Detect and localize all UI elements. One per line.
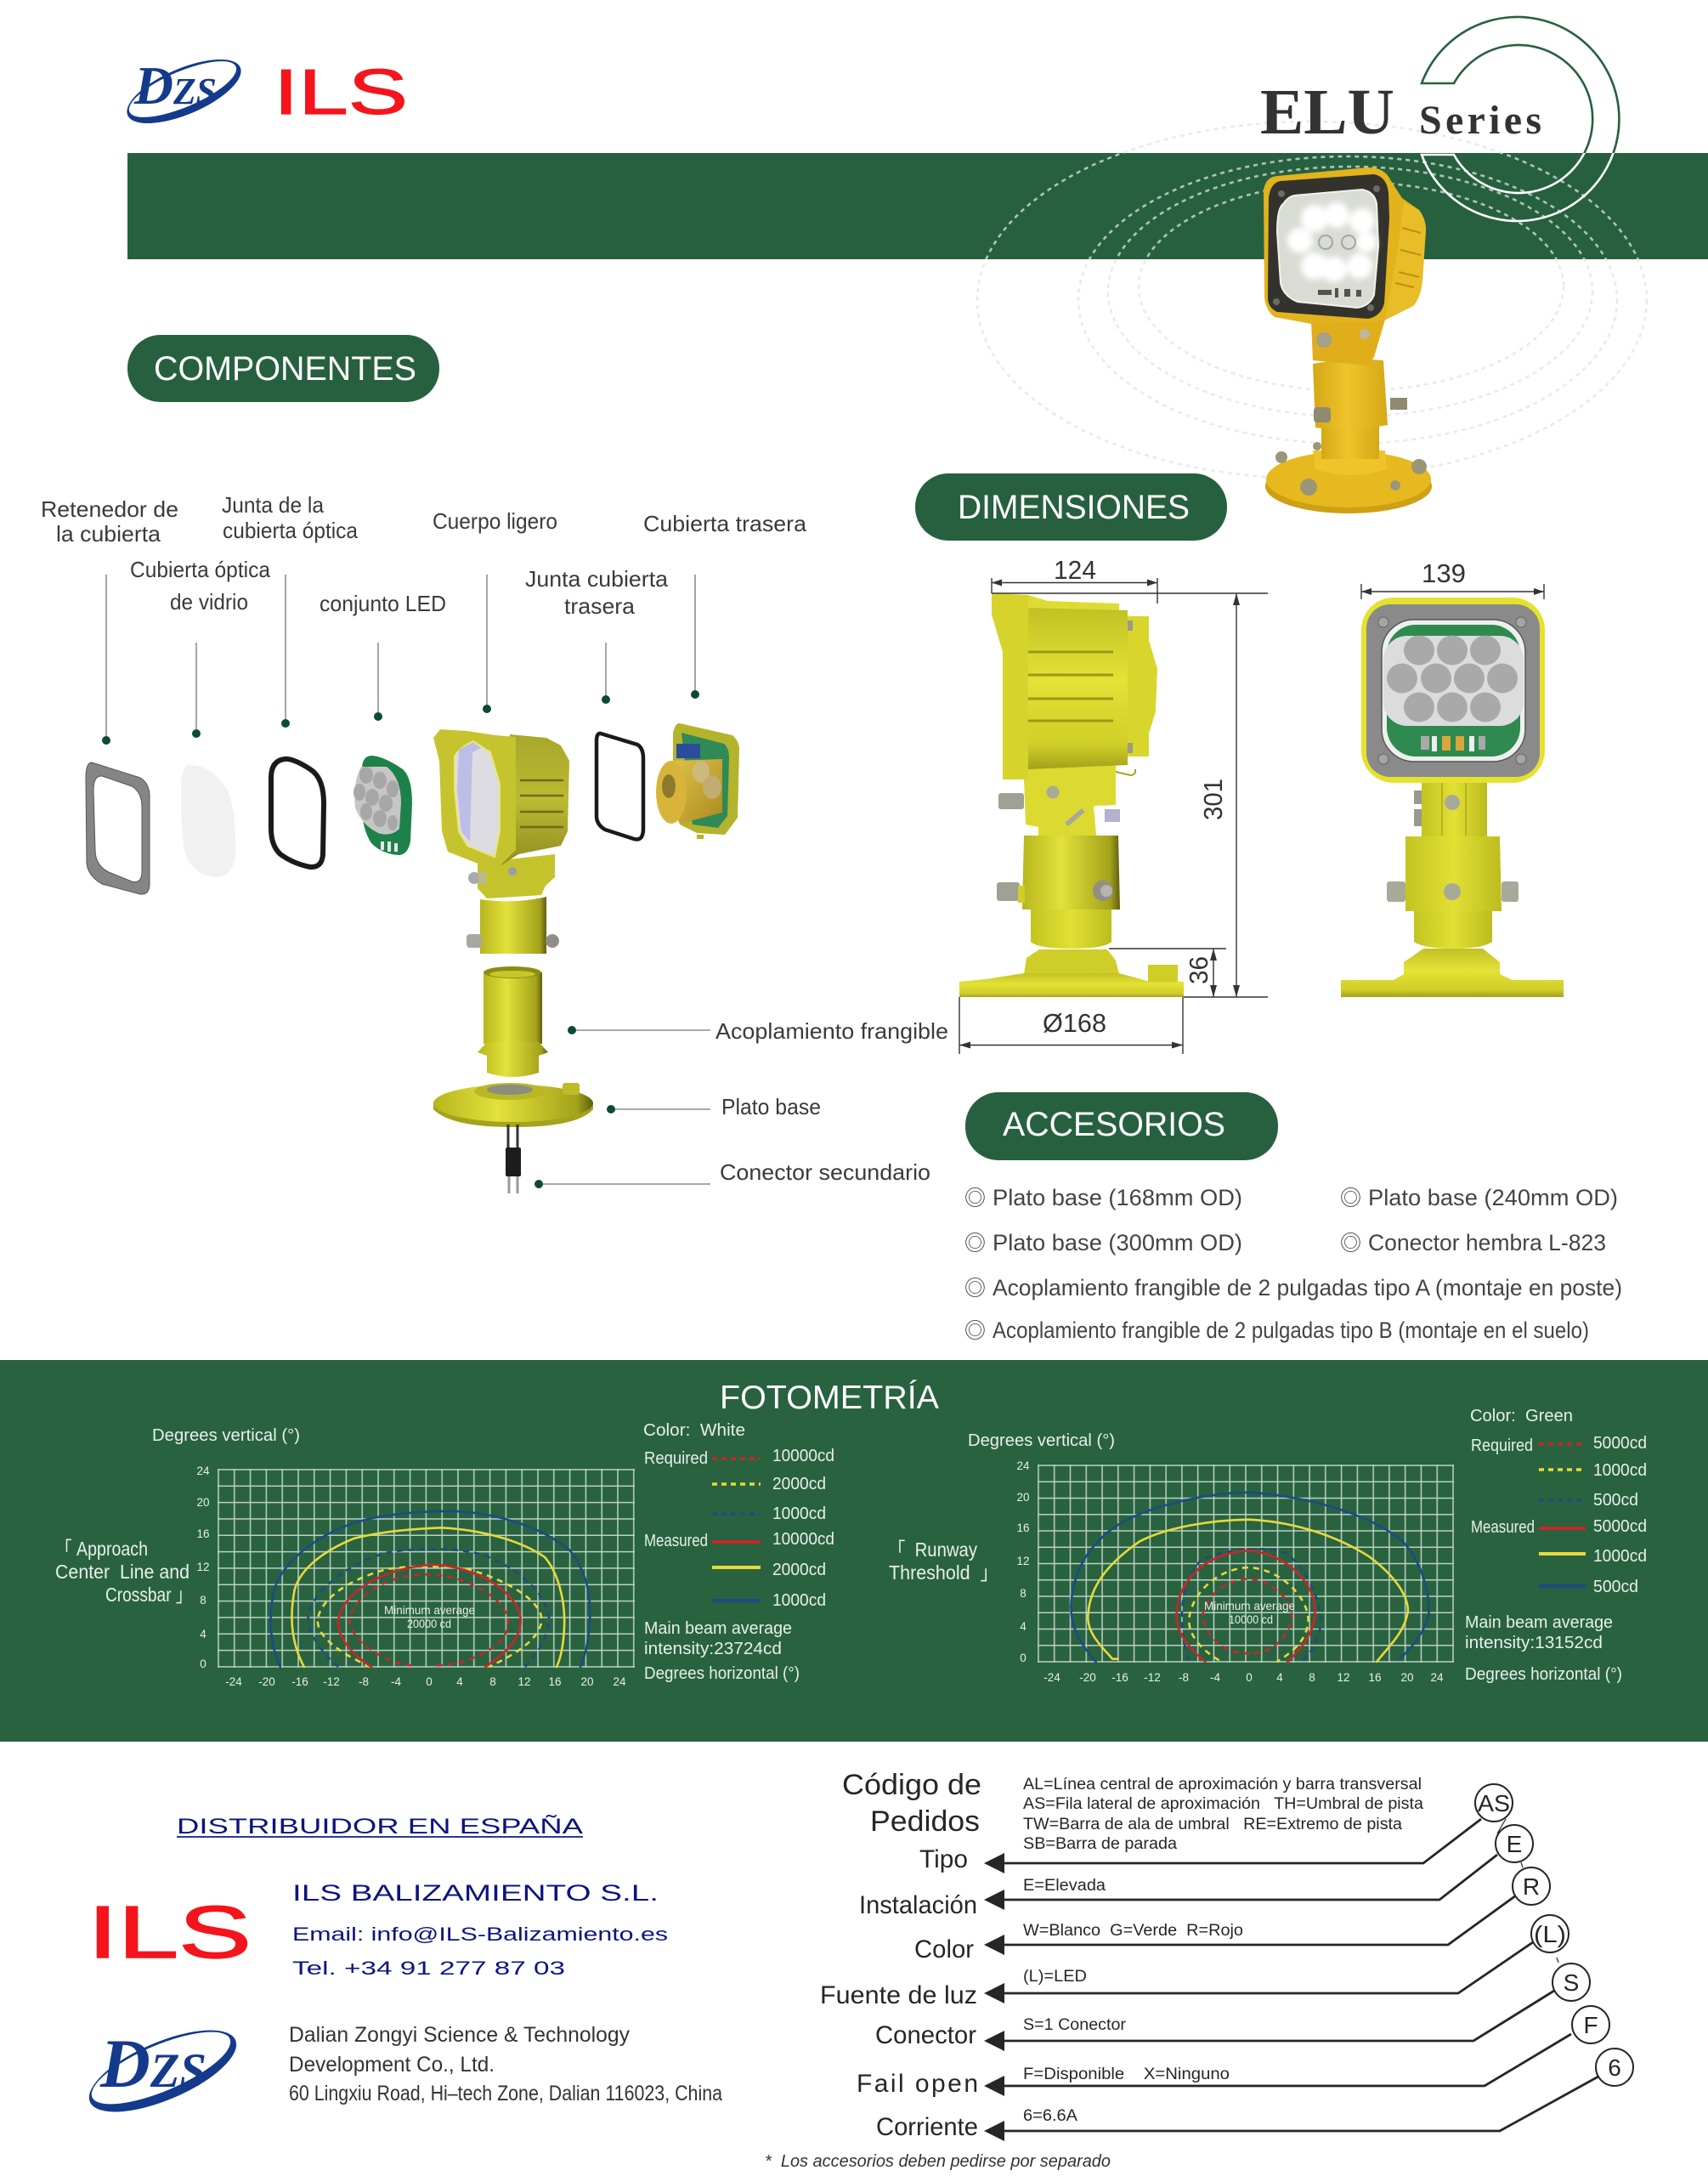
accessories list: Acoplamiento frangible de 2 pulgadas tipo A (montaje en poste) (993, 1275, 1622, 1300)
logo: DZS bottom: DZS (99, 2025, 206, 2102)
axis labels: 4 (1020, 1620, 1026, 1633)
component labels (41, 492, 948, 1185)
axis labels: 12 (196, 1561, 210, 1573)
part: rear cover (656, 723, 739, 839)
legend: green threshold: 500cd (1593, 1491, 1638, 1510)
accessories list: Conector hembra L-823 (1368, 1230, 1606, 1255)
axis labels: -20 (1079, 1671, 1096, 1684)
dashed concentric rings (977, 122, 1647, 479)
row labels: Instalación (859, 1891, 977, 1919)
dimension values: 301 (1198, 779, 1228, 820)
panel: exploded components (41, 492, 948, 1193)
row labels: Fail open (857, 2070, 978, 2098)
option notes: AL=Línea central de aproximación y barra transversal (1023, 1776, 1422, 1794)
axis labels (1016, 1459, 1444, 1684)
legend: green threshold: 1000cd (1593, 1461, 1647, 1480)
accessories list: Plato base (168mm OD) (993, 1185, 1242, 1210)
legend: white approach: Color: White (643, 1421, 745, 1440)
heading: ordering code: Pedidos (870, 1805, 980, 1838)
axis labels: 0 (426, 1675, 433, 1688)
axis labels: -16 (291, 1675, 308, 1688)
part: light body (433, 729, 569, 898)
legend: white approach: 2000cd (772, 1561, 826, 1579)
part: cover retainer (86, 762, 150, 894)
legend: green threshold (1465, 1407, 1647, 1684)
header banner (127, 153, 1708, 259)
legend: white approach (643, 1421, 834, 1683)
axis labels: 4 (1276, 1671, 1283, 1684)
chart: green threshold: Threshold 」 (889, 1561, 998, 1584)
axis labels: 8 (1020, 1587, 1026, 1600)
chart: green threshold (888, 1431, 1454, 1684)
axis labels: 16 (1016, 1522, 1030, 1534)
heading: ordering code (842, 1769, 981, 1838)
axis labels: -16 (1111, 1671, 1128, 1684)
logo: DZS top (119, 47, 249, 136)
component labels: Junta de la (222, 492, 324, 518)
panel: photometry (0, 1360, 1708, 1742)
head (1264, 167, 1426, 324)
legend: green threshold: intensity:13152cd (1465, 1634, 1603, 1652)
chart: white approach: 20000 cd (407, 1617, 451, 1630)
part: optical gasket (271, 759, 324, 867)
dimension lines (959, 555, 1544, 1054)
axis labels: 12 (1016, 1555, 1030, 1567)
accessories list: ◎ (964, 1182, 986, 1212)
distributor contact: Tel. +34 91 277 87 03 (292, 1958, 565, 1979)
title: ELU Series: Series (1419, 98, 1541, 143)
part: LED assembly (353, 756, 412, 855)
dimension values (1043, 555, 1466, 1038)
series ring emblem (1422, 17, 1619, 221)
row labels: Tipo (919, 1845, 968, 1873)
chart: green threshold: Minimum average (1204, 1599, 1295, 1612)
company address: 60 Lingxiu Road, Hi–tech Zone, Dalian 116023, China (289, 2082, 722, 2105)
chart: white approach: Degrees vertical (°) (152, 1426, 300, 1445)
heading: COMPONENTES: COMPONENTES (154, 350, 416, 388)
heading: distributor: DISTRIBUIDOR EN ESPAÑA (177, 1814, 583, 1839)
component labels: trasera (564, 593, 636, 619)
component labels: la cubierta (56, 521, 161, 547)
distributor block (79, 1814, 722, 2128)
accessories list: Acoplamiento frangible de 2 pulgadas tipo B (montaje en el suelo) (993, 1318, 1589, 1343)
heading: ordering code: Código de (842, 1769, 981, 1801)
lamp photo (1264, 167, 1432, 513)
accessories list: Plato base (300mm OD) (993, 1230, 1242, 1255)
legend: green threshold: Degrees horizontal (°) (1465, 1665, 1622, 1684)
part: glass cover (181, 765, 235, 877)
chart: white approach: 「 Approach (55, 1538, 148, 1560)
legend: white approach: 1000cd (772, 1591, 826, 1610)
legend: white approach: Required (644, 1449, 708, 1468)
dimension values: 36 (1184, 956, 1213, 984)
option notes: F=Disponible X=Ninguno (1023, 2066, 1230, 2083)
component labels: de vidrio (170, 589, 248, 615)
option notes: TW=Barra de ala de umbral RE=Extremo de pista (1023, 1816, 1402, 1833)
code circles: E (1507, 1831, 1522, 1857)
chart: white approach: Center Line and (55, 1561, 189, 1583)
option notes: W=Blanco G=Verde R=Rojo (1023, 1922, 1243, 1940)
component labels: Retenedor de (41, 496, 178, 522)
axis labels: 8 (489, 1675, 496, 1688)
neck (1311, 320, 1385, 366)
chart: white approach: Crossbar 」 (105, 1584, 192, 1606)
drawing: side view (959, 593, 1184, 997)
heading: ACCESORIOS (965, 1092, 1278, 1160)
column (1313, 360, 1407, 459)
axis labels: -20 (258, 1675, 275, 1688)
panel: ordering code (765, 1769, 1633, 2171)
arrows (984, 1819, 1598, 2141)
code circles: R (1523, 1873, 1540, 1900)
company address (289, 2023, 722, 2105)
code circles (1475, 1784, 1633, 2086)
part: base plate (433, 1083, 593, 1127)
legend: white approach: Degrees horizontal (°) (644, 1664, 800, 1683)
company address: Dalian Zongyi Science & Technology (289, 2023, 630, 2047)
axis labels: -12 (323, 1675, 340, 1688)
axis labels: -12 (1144, 1671, 1161, 1684)
axis labels: 20 (1400, 1671, 1414, 1684)
component labels: Cuerpo ligero (433, 508, 557, 534)
option notes: SB=Barra de parada (1023, 1835, 1177, 1853)
heading: COMPONENTES (127, 335, 439, 402)
leader lines and dots (102, 575, 710, 1188)
title: ELU Series (1260, 76, 1541, 148)
axis labels: 12 (517, 1675, 531, 1688)
axis labels: -24 (1043, 1671, 1060, 1684)
accessories list (964, 1182, 1622, 1345)
axis labels: 24 (1430, 1671, 1444, 1684)
component labels: Cubierta trasera (643, 511, 807, 536)
axis labels: 24 (1016, 1459, 1030, 1472)
legend: green threshold: 5000cd (1593, 1434, 1647, 1453)
option notes: S=1 Conector (1023, 2016, 1127, 2034)
option notes (1023, 1776, 1423, 2125)
dimension values: Ø168 (1043, 1008, 1106, 1038)
axis labels: -8 (359, 1675, 369, 1688)
title: ELU Series: ELU (1260, 76, 1394, 148)
company address: Development Co., Ltd. (289, 2053, 495, 2077)
axis labels: 20 (580, 1675, 594, 1688)
legend: white approach: 10000cd (772, 1447, 834, 1465)
legend: green threshold: Measured (1471, 1518, 1535, 1537)
component labels: Cubierta óptica (130, 557, 270, 582)
axis labels: 16 (548, 1675, 562, 1688)
axis labels: 20 (1016, 1491, 1030, 1504)
code circles: S (1564, 1969, 1579, 1996)
distributor contact: ILS BALIZAMIENTO S.L. (292, 1880, 659, 1906)
axis labels: 16 (196, 1527, 210, 1540)
legend: green threshold: 1000cd (1593, 1547, 1647, 1566)
chart: white approach: Minimum average (384, 1603, 475, 1617)
axis labels: 20 (196, 1496, 210, 1509)
component labels: Junta cubierta (525, 566, 669, 592)
accessories list: ◎ (964, 1227, 986, 1257)
axis labels: 4 (456, 1675, 463, 1688)
row labels: Conector (875, 2021, 976, 2049)
part: lower column (467, 897, 559, 954)
base flange (1265, 442, 1432, 513)
chart: green threshold: 「 Runway (888, 1538, 977, 1561)
legend: green threshold: 5000cd (1593, 1517, 1647, 1536)
drawing: front view (1341, 598, 1564, 997)
legend: white approach: 1000cd (772, 1504, 826, 1523)
axis labels: 8 (200, 1594, 206, 1606)
legend: white approach: 10000cd (772, 1530, 834, 1549)
accessories list: ◎ (1340, 1182, 1361, 1212)
axis labels (196, 1465, 626, 1688)
option notes: 6=6.6A (1023, 2107, 1077, 2125)
axis labels: 8 (1309, 1671, 1315, 1684)
heading: ACCESORIOS: ACCESORIOS (1003, 1106, 1225, 1143)
logo: DZS bottom (79, 2014, 246, 2128)
part: secondary connector (506, 1125, 521, 1193)
axis labels: 4 (200, 1628, 206, 1640)
axis labels: -4 (391, 1675, 401, 1688)
accessories list: Plato base (240mm OD) (1368, 1185, 1618, 1210)
legend: white approach: Main beam average (644, 1619, 792, 1638)
axis labels: -24 (225, 1675, 242, 1688)
component labels: Acoplamiento frangible (715, 1018, 948, 1044)
distributor contact (292, 1880, 668, 1979)
axis labels: -8 (1179, 1671, 1189, 1684)
chart: white approach (55, 1426, 635, 1688)
legend: white approach: intensity:23724cd (644, 1640, 782, 1658)
axis labels: 24 (196, 1465, 210, 1477)
component labels: conjunto LED (320, 591, 446, 616)
heading: DIMENSIONES: DIMENSIONES (958, 489, 1190, 526)
logo: DZS top: DZS (133, 55, 217, 116)
axis labels: 16 (1368, 1671, 1382, 1684)
chart: green threshold: Degrees vertical (°) (968, 1431, 1115, 1450)
option notes: E=Elevada (1023, 1877, 1106, 1895)
part: frangible coupling (478, 966, 548, 1077)
footnote: * Los accesorios deben pedirse por separado (765, 2152, 1111, 2171)
code circles: F (1583, 2012, 1598, 2038)
row labels: Color (914, 1935, 974, 1964)
code circles: (L) (1534, 1921, 1566, 1947)
heading: DIMENSIONES (915, 473, 1227, 541)
row labels (820, 1845, 978, 2141)
legend: green threshold: Color: Green (1470, 1407, 1573, 1425)
axis labels: 0 (1246, 1671, 1253, 1684)
dimension values: 124 (1054, 555, 1096, 585)
axis labels: 24 (613, 1675, 626, 1688)
legend: green threshold: Main beam average (1465, 1613, 1613, 1632)
logo: ILS red top: ILS (274, 56, 408, 128)
row labels: Corriente (876, 2113, 978, 2141)
distributor contact: Email: info@ILS-Balizamiento.es (292, 1924, 668, 1945)
component labels: Conector secundario (720, 1159, 930, 1185)
row labels: Fuente de luz (820, 1981, 977, 2009)
option notes: (L)=LED (1023, 1968, 1087, 1986)
legend: white approach: 2000cd (772, 1475, 826, 1493)
part: rear gasket (597, 734, 643, 840)
heading: FOTOMETRÍA: FOTOMETRÍA (720, 1380, 939, 1416)
option notes: AS=Fila lateral de aproximación TH=Umbral de pista (1023, 1795, 1423, 1813)
axis labels: 12 (1337, 1671, 1350, 1684)
chart: green threshold: 10000 cd (1229, 1612, 1273, 1626)
component labels: cubierta óptica (223, 518, 359, 543)
legend: green threshold: Required (1471, 1436, 1533, 1455)
axis labels: -4 (1210, 1671, 1220, 1684)
legend: green threshold: 500cd (1593, 1578, 1638, 1596)
axis labels: 0 (200, 1658, 206, 1670)
axis labels: 0 (1020, 1652, 1026, 1664)
accessories list: ◎ (964, 1272, 986, 1302)
logo: ILS red large: ILS (88, 1891, 252, 1974)
accessories list: ◎ (1340, 1227, 1361, 1257)
dimension values: 139 (1422, 558, 1466, 588)
accessories list: ◎ (964, 1314, 986, 1345)
code circles: AS (1478, 1790, 1510, 1816)
component labels: Plato base (721, 1094, 821, 1119)
code circles: 6 (1608, 2054, 1621, 2081)
legend: white approach: Measured (644, 1532, 708, 1550)
